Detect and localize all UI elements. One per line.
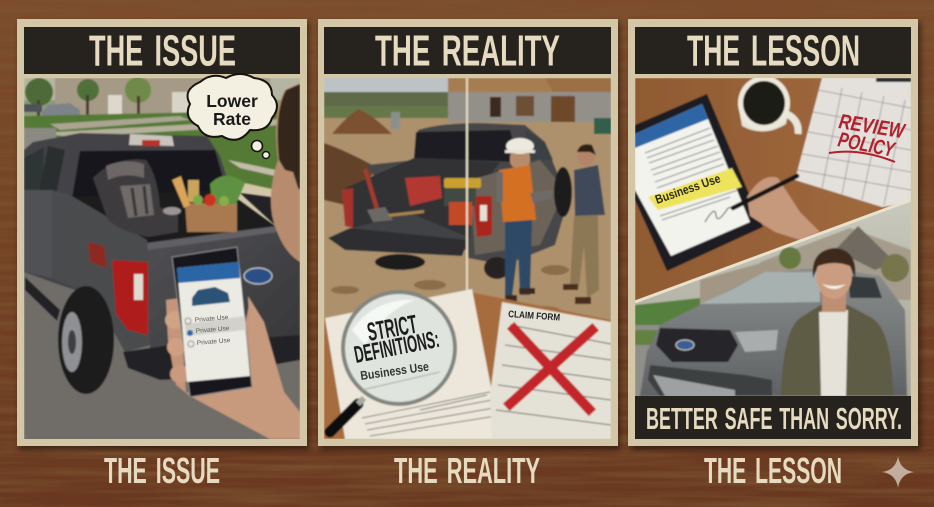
heading bar: the reality: THE REALITY bbox=[375, 26, 560, 76]
man head bbox=[271, 83, 300, 262]
hand with pen bbox=[733, 176, 820, 240]
desk under papers bbox=[324, 292, 611, 439]
smiling man bbox=[781, 248, 893, 396]
panel: the issue bbox=[17, 19, 309, 450]
calendar text: review policy: POLICY bbox=[836, 128, 898, 162]
claim form paper bbox=[490, 302, 611, 439]
magnifier text: strict definitions: STRICT bbox=[365, 309, 419, 347]
caption: the lesson: THE LESSON bbox=[704, 450, 842, 491]
calendar text: review policy bbox=[829, 110, 908, 162]
coffee mug bbox=[738, 76, 798, 134]
grocery bag bbox=[172, 176, 245, 232]
magnifier text: strict definitions bbox=[352, 309, 442, 383]
scene: desk and happy owner bbox=[635, 78, 911, 396]
worker bbox=[497, 138, 553, 302]
Ford badge bbox=[244, 268, 272, 284]
truck bbox=[328, 123, 572, 279]
phone option labels bbox=[195, 314, 231, 347]
magnifier text: strict definitions: Business Use bbox=[359, 359, 430, 383]
icon: sparkle bbox=[882, 456, 914, 488]
calendar text: review policy: REVIEW bbox=[837, 110, 908, 144]
thought bubble: lower rate bbox=[188, 74, 277, 158]
scene: truck with child seat and groceries bbox=[24, 77, 300, 440]
heading bar: the reality bbox=[324, 26, 611, 76]
caption: the issue: THE ISSUE bbox=[104, 450, 220, 491]
caption: the reality: THE REALITY bbox=[394, 450, 540, 491]
panel: the reality bbox=[318, 19, 620, 450]
road bbox=[24, 260, 300, 440]
rear tyre bbox=[58, 286, 114, 394]
tools in bed bbox=[363, 168, 481, 225]
magnifier handle bbox=[330, 398, 364, 432]
calendar bbox=[795, 78, 911, 207]
truck body bbox=[24, 133, 300, 378]
divider bbox=[466, 78, 468, 290]
magnifier lens bbox=[343, 292, 455, 404]
thought bubble: lower rate: Rate bbox=[213, 109, 251, 129]
heading bar: the issue bbox=[24, 26, 300, 76]
magnifier text: strict definitions: DEFINITIONS: bbox=[352, 326, 442, 369]
lower photo background bbox=[635, 202, 911, 396]
house bbox=[700, 226, 911, 310]
truck front bbox=[640, 268, 907, 396]
scene: truck at construction site bbox=[324, 78, 611, 439]
strict definitions paper bbox=[325, 289, 501, 439]
hand holding phone bbox=[165, 296, 300, 439]
phone option labels: Private Use bbox=[197, 337, 231, 347]
claim form title: CLAIM FORM bbox=[508, 309, 561, 324]
phone option labels: Private Use bbox=[195, 314, 229, 324]
inspector bbox=[563, 144, 605, 304]
lawn and road bbox=[635, 298, 701, 396]
tablet bbox=[635, 94, 763, 271]
phone bbox=[172, 247, 252, 397]
neighbourhood background bbox=[24, 78, 300, 190]
tablet text: business use: Business Use bbox=[653, 171, 722, 207]
heading bar: the issue: THE ISSUE bbox=[89, 26, 236, 76]
divider bbox=[635, 200, 911, 302]
desk bbox=[635, 78, 911, 303]
child car seat bbox=[93, 159, 181, 237]
thought bubble: lower rate: Lower bbox=[206, 91, 258, 111]
phone option labels: Private Use bbox=[196, 325, 230, 335]
panel: the lesson bbox=[628, 19, 921, 450]
red X bbox=[510, 329, 592, 409]
site background bbox=[324, 78, 611, 323]
bumper bbox=[123, 335, 300, 380]
